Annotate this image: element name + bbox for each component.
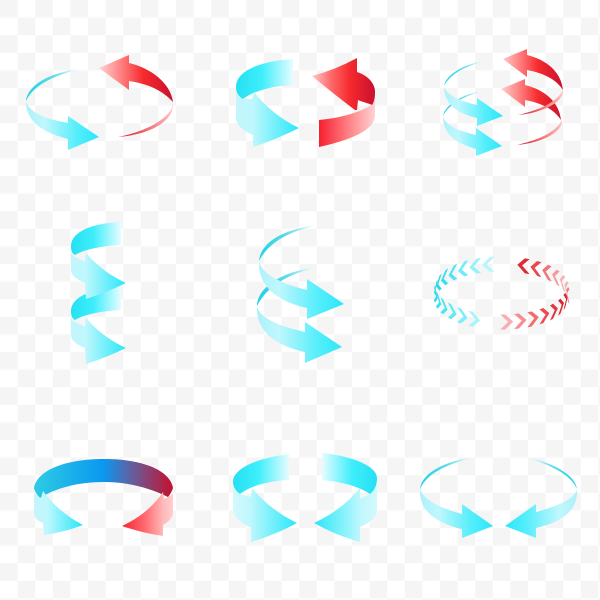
red right arrow [122,492,173,536]
icon: thin two-way cyan and red rotation arrows [26,55,173,150]
icon: blue-to-red arch with two arrows [34,459,173,536]
lower cyan arrow [443,117,502,156]
left ribbon top [233,454,289,494]
red ribbon lower band [319,92,375,147]
cyan chevron arc [434,256,495,328]
arch ribbon [34,459,173,498]
lower red arrow [501,79,561,120]
left ribbon arrow [233,487,297,542]
icon: converging thin cyan arrows [420,457,577,538]
icon: stacked thin cyan spiral arrows [257,225,344,363]
upper red arrow [503,49,563,90]
red ribbon arrow [312,58,375,110]
left sliver [420,457,475,489]
upper red sliver [518,90,563,115]
lower arrow [257,307,342,363]
right ribbon arrow [314,483,377,542]
upper arrow [259,262,344,319]
cyan ribbon arrow [236,92,299,147]
upper ribbon top [71,222,121,255]
cyan left arrow [34,491,83,535]
icon: wide cyan and red ribbon arrows [236,58,375,147]
red arrow [99,55,173,102]
upper cyan arrow [444,87,503,126]
lower sliver [257,267,318,306]
icon: stacked cyan spiral ribbon arrows [71,222,126,364]
right arrow [505,490,577,538]
red chevron arc [500,257,569,330]
icon: double-stacked thin rotation arrows [443,49,563,156]
upper sliver [259,225,318,261]
right sliver [527,457,577,489]
right ribbon top [322,453,377,494]
left arrow [420,490,493,538]
red front sliver [118,103,173,137]
lower ribbon arrow [71,317,126,364]
upper cyan sliver [444,61,485,86]
cyan ribbon top [236,59,293,99]
icon: converging wide cyan ribbon arrows [233,453,377,542]
cyan arrow [26,102,99,150]
lower cyan sliver [443,91,483,116]
cyan back sliver [26,69,80,101]
lower ribbon top [71,287,121,320]
icon: chevron ring in cyan and red [434,256,569,330]
upper ribbon arrow [71,252,126,299]
lower red sliver [517,120,562,145]
